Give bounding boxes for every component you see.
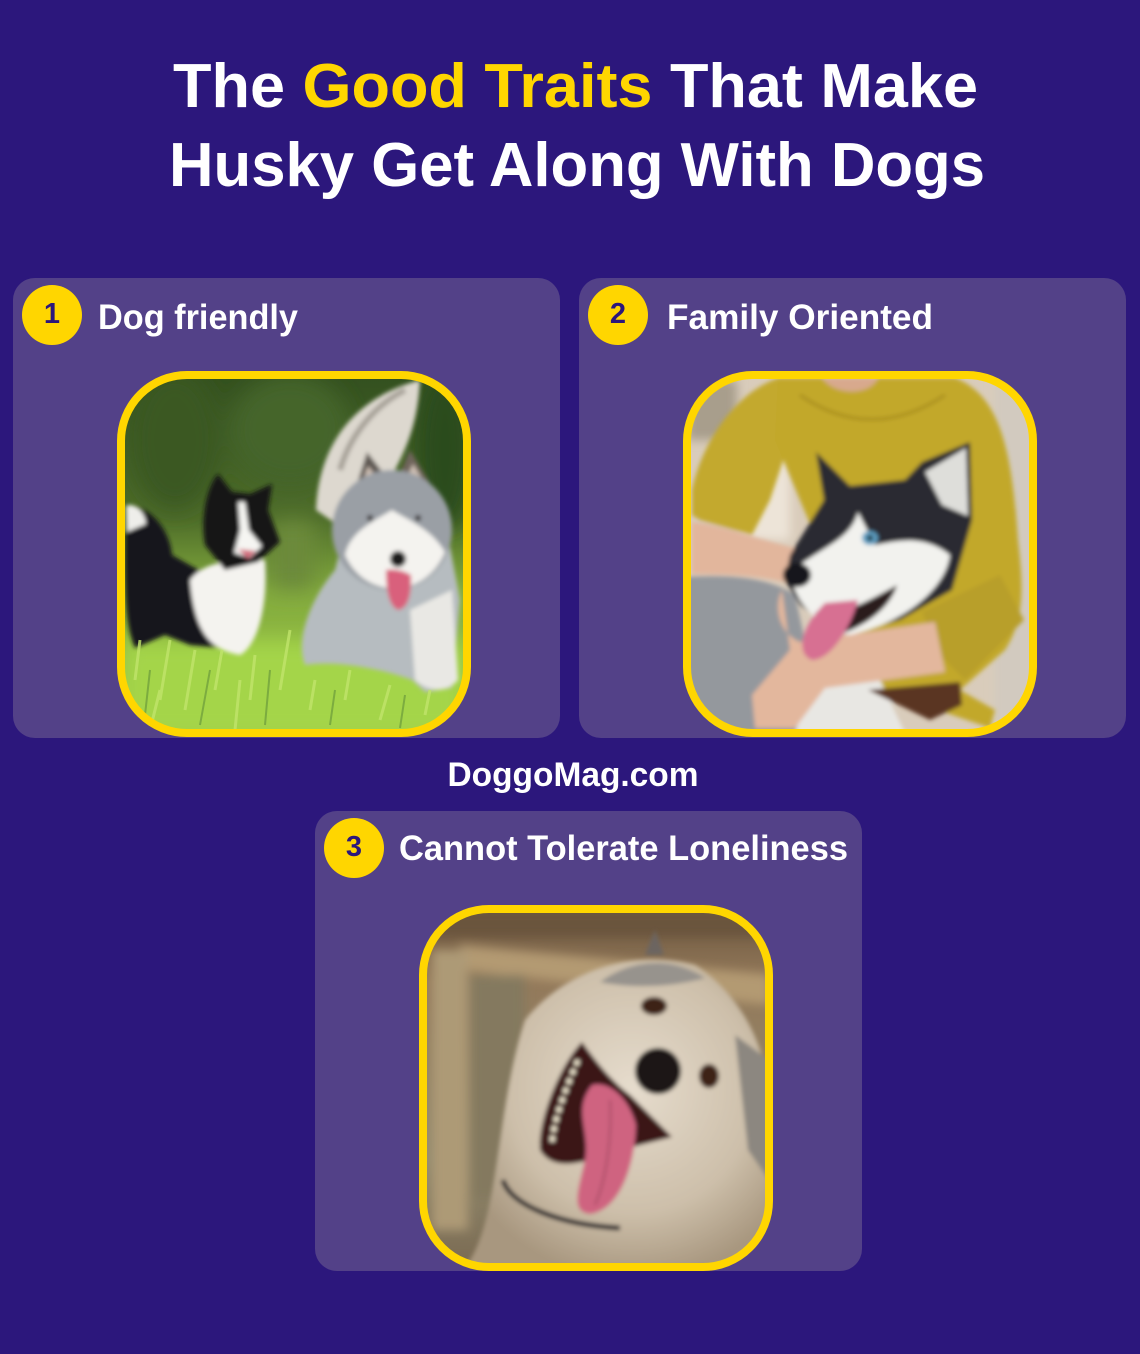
eyes [641,997,667,1015]
heading: cannot tolerate loneliness: Cannot Tolerate Loneliness [399,829,848,868]
forearm left [692,522,810,585]
panel: cannot tolerate loneliness [315,811,862,1271]
collar [503,1180,620,1228]
mouth [842,584,899,634]
photo: husky with tongue out [423,909,770,1267]
photo: border collie and husky on grass [121,370,475,740]
ear [645,930,664,955]
photo: woman hugging husky [687,375,1033,733]
number badge 1 [22,285,82,345]
number badge 1: 1 [44,298,60,330]
title: The Good Traits That Make [173,52,978,121]
husky ears [356,451,383,482]
sleeve left [692,378,790,535]
number badge 3: 3 [346,831,362,863]
lower arm [752,590,945,728]
dog body [691,574,806,729]
number badge 2: 2 [610,298,626,330]
collie body [125,506,218,650]
panel: dog friendly [13,278,560,740]
nose [635,1048,681,1094]
husky head [332,470,452,590]
collar [868,682,962,720]
panel: family oriented [579,278,1126,738]
husky tongue [386,570,411,610]
neck [822,378,878,392]
photo frame [121,375,467,733]
heading: dog friendly: Dog friendly [98,298,299,337]
watermark: DoggoMag.com [448,756,698,794]
dog fur [465,960,769,1267]
title: Husky Get Along With Dogs [169,131,985,200]
photo frame [687,375,1033,733]
husky body [299,546,463,694]
heading: family oriented: Family Oriented [667,298,933,337]
grass blades [135,630,430,730]
mouth [540,1042,672,1164]
tongue [802,600,858,660]
number badge 2 [588,285,648,345]
dog head [785,442,972,635]
sweater torso [775,378,1022,728]
title [169,52,985,200]
number badge 3 [324,818,384,878]
tongue [577,1084,636,1214]
photo frame [423,909,769,1267]
collie head [203,474,280,570]
husky tail [316,380,420,530]
